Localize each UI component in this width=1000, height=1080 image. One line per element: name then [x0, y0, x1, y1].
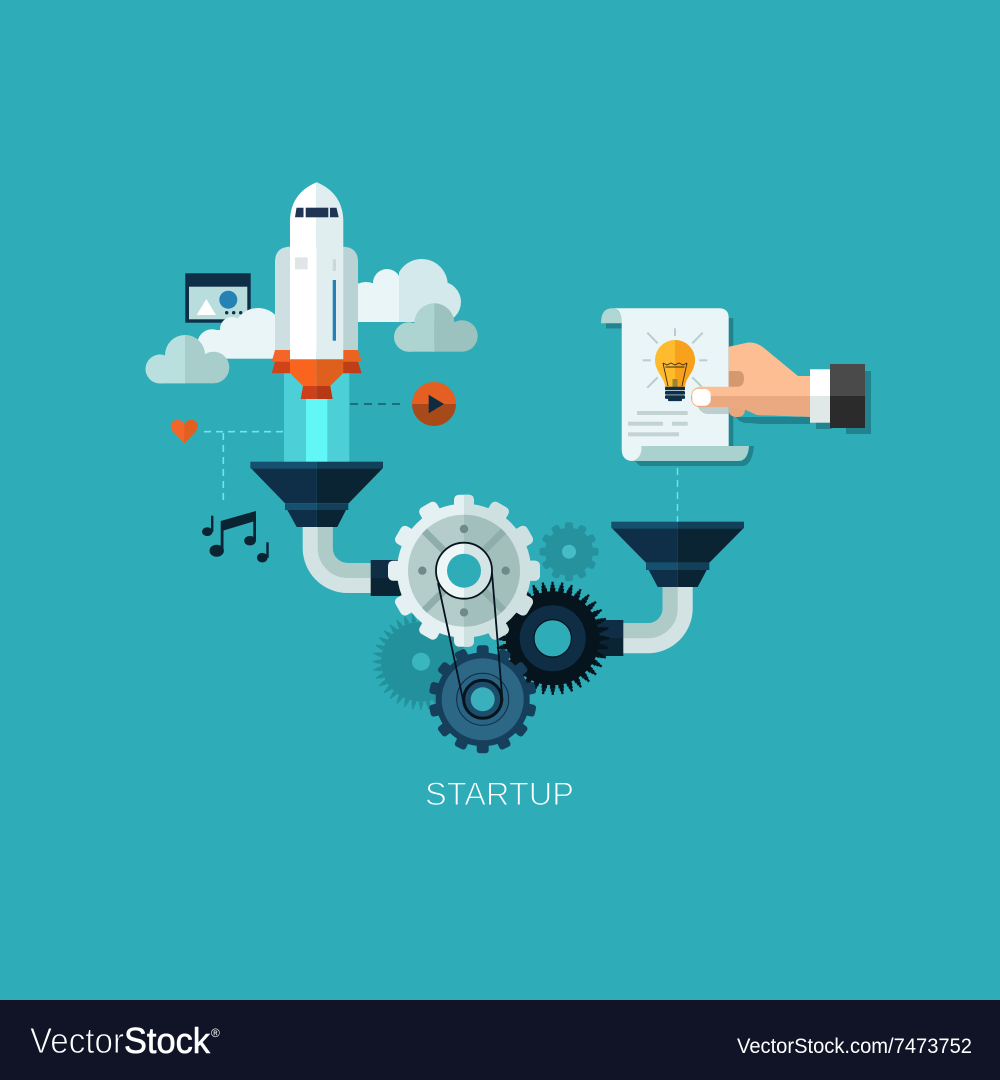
rocket fins — [272, 350, 362, 373]
dashed connector: paper to funnel — [676, 468, 678, 522]
dashed connector: heart to flame — [204, 432, 284, 500]
shirt cuff — [810, 369, 830, 423]
rocket engine nozzle — [290, 359, 343, 399]
icon: heart — [171, 420, 198, 443]
left funnel — [250, 462, 383, 527]
cloud: lower right — [394, 303, 478, 352]
left pipe — [318, 527, 372, 578]
gear: teal spiked — [374, 615, 468, 708]
icon: browser window — [185, 273, 251, 323]
thumbnail — [692, 389, 711, 406]
icon: light bulb — [643, 328, 707, 401]
thumb shadow on paper — [698, 407, 729, 414]
right pipe connector — [598, 620, 623, 656]
jacket sleeve — [830, 364, 865, 428]
gear: large grey — [388, 495, 540, 647]
hand — [691, 342, 810, 417]
rocket windows — [295, 208, 339, 217]
paper scroll — [601, 308, 749, 461]
title: STARTUP — [425, 776, 574, 812]
rocket panels — [295, 257, 336, 341]
cloud: behind rocket right — [358, 259, 461, 322]
footer logo: Vector — [30, 1020, 124, 1061]
paper bottom curl — [632, 446, 749, 461]
icon: music notes — [202, 511, 269, 562]
rocket flame — [284, 372, 349, 462]
footer url: VectorStock.com/7473752 — [737, 1035, 972, 1058]
icon: play button — [412, 382, 456, 426]
gear: small teal — [540, 522, 598, 581]
gear: black spiked — [498, 583, 608, 693]
bulb rays — [643, 328, 707, 388]
gear: bottom blue — [429, 645, 537, 753]
paper text lines — [628, 411, 688, 436]
footer registered mark: ® — [211, 1026, 220, 1040]
paper shadow — [606, 318, 754, 466]
dashed connector: flame to play button — [350, 403, 405, 405]
paper top curl — [601, 308, 622, 323]
hand shadow — [736, 371, 871, 434]
footer logo bold part: Stock — [124, 1020, 211, 1061]
rocket — [272, 182, 362, 399]
cloud: lower left — [146, 335, 229, 384]
right pipe — [620, 587, 678, 638]
rocket boosters — [275, 247, 358, 351]
left pipe connector — [371, 560, 402, 596]
footer bar — [0, 1000, 1000, 1080]
drive belt — [436, 543, 502, 702]
right funnel — [611, 522, 744, 587]
cloud: behind rocket left — [197, 308, 283, 359]
rocket body — [290, 182, 343, 359]
